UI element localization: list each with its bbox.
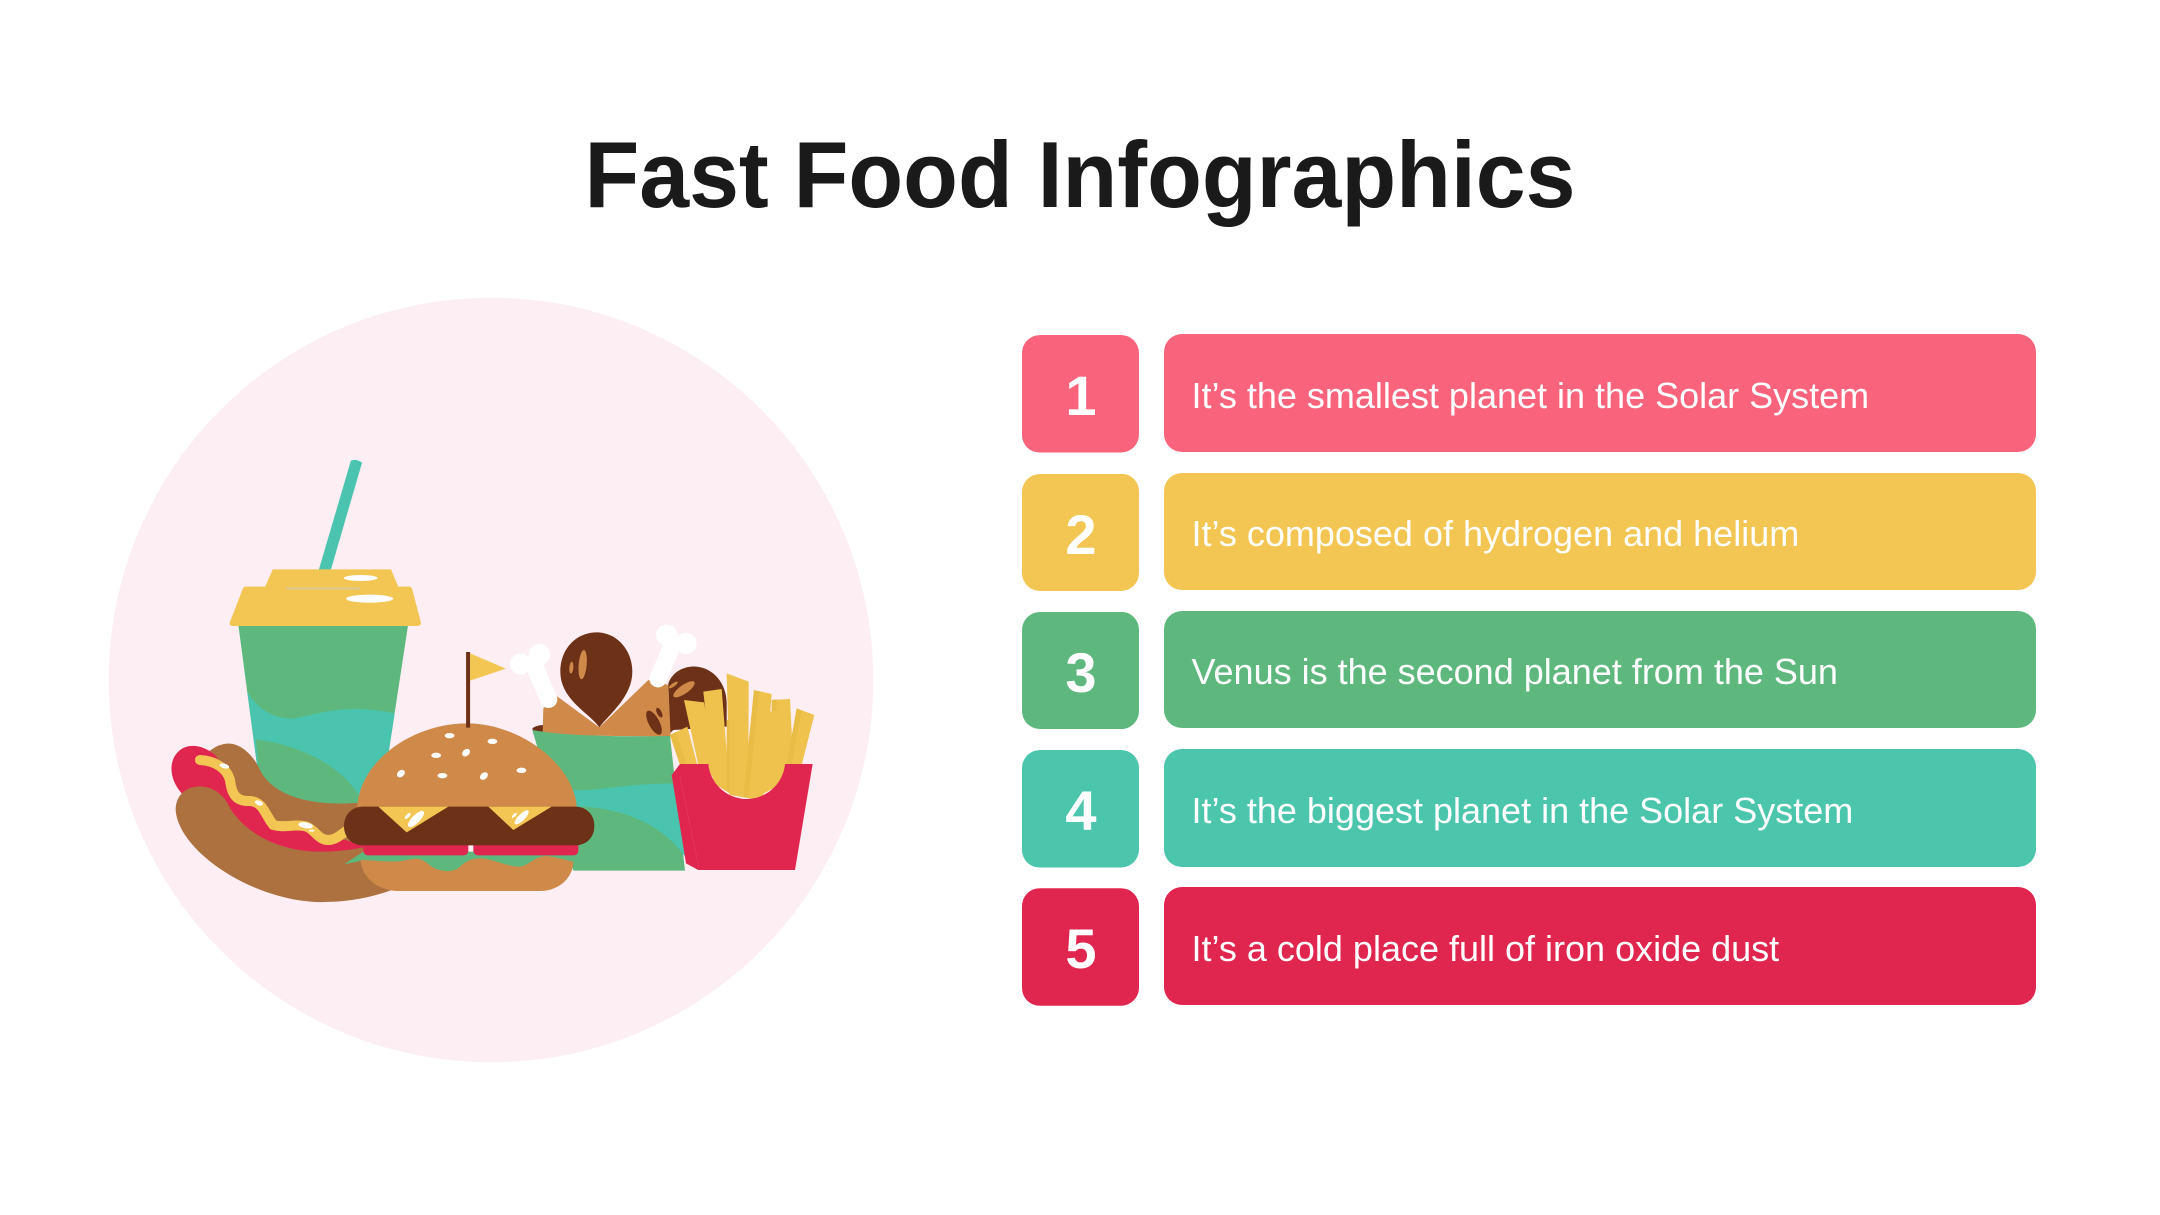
text bar 5: It’s a cold place full of iron oxide dust — [1192, 928, 1779, 969]
cup lower wave — [256, 739, 360, 807]
icon: french fries — [670, 673, 814, 870]
number 5: 5 — [1065, 917, 1097, 980]
number 4 — [1022, 750, 1140, 868]
carton fold — [680, 777, 699, 868]
sausage — [171, 746, 365, 858]
text bar 4: It’s the biggest planet in the Solar System — [1192, 790, 1853, 831]
chicken highlights — [569, 650, 697, 700]
box body — [532, 730, 685, 871]
burger filling and base — [344, 807, 594, 891]
back drumstick — [668, 667, 727, 733]
text bar 5 — [1164, 887, 2036, 1005]
chicken meat — [543, 680, 671, 737]
item 3 — [1022, 611, 2036, 729]
number 2 — [1022, 474, 1140, 591]
right bone — [656, 624, 697, 679]
top bun — [357, 723, 577, 807]
lettuce — [344, 852, 578, 875]
item 4 — [1022, 749, 2036, 868]
cheese — [378, 807, 552, 832]
front bun — [176, 786, 392, 902]
mustard highlights — [219, 762, 315, 832]
lid groove — [286, 587, 360, 590]
text bar 2 — [1164, 472, 2036, 590]
left bone — [510, 644, 550, 699]
fries carton — [672, 764, 813, 870]
title: Fast Food Infographics — [584, 122, 1575, 226]
fries shadows — [670, 690, 802, 797]
number 1 — [1022, 335, 1140, 452]
text bar 3 — [1164, 611, 2036, 728]
text bar 3: Venus is the second planet from the Sun — [1192, 651, 1838, 692]
number 4: 4 — [1065, 779, 1097, 842]
back bun — [210, 743, 362, 843]
item 1 — [1022, 334, 2036, 452]
text bar 1: It’s the smallest planet in the Solar System — [1192, 375, 1869, 416]
text bar 4 — [1164, 749, 2036, 867]
straw — [319, 460, 362, 570]
flag pole — [466, 652, 470, 728]
patty — [344, 807, 594, 845]
cup body — [238, 625, 408, 807]
lid highlights — [344, 575, 393, 603]
icon: drink cup — [230, 460, 421, 807]
number 3 — [1022, 612, 1140, 729]
cheese highlights — [404, 808, 531, 829]
number 2: 2 — [1065, 502, 1097, 566]
number 5 — [1022, 888, 1140, 1006]
icon: chicken box — [510, 624, 727, 871]
number 3: 3 — [1065, 641, 1097, 704]
mustard — [200, 760, 348, 840]
item 5 — [1022, 887, 2036, 1006]
flag — [470, 653, 506, 681]
upper bun — [357, 652, 577, 807]
drumstick — [560, 632, 632, 727]
sesame seeds — [395, 733, 526, 781]
bottom bun — [361, 856, 573, 891]
lid — [230, 569, 421, 626]
fries — [670, 673, 814, 799]
box teal wave — [572, 783, 685, 857]
background circle — [109, 298, 873, 1062]
cup teal wave — [247, 692, 395, 807]
icon: burger — [344, 652, 594, 891]
icon: hot dog — [171, 743, 392, 902]
item 2 — [1022, 473, 2036, 591]
text bar 2: It’s composed of hydrogen and helium — [1192, 513, 1799, 554]
tomato — [363, 837, 578, 855]
rear rim — [532, 725, 543, 733]
text bar 1 — [1164, 334, 2036, 452]
chicken crumbs — [643, 707, 665, 737]
number 1: 1 — [1065, 364, 1097, 427]
